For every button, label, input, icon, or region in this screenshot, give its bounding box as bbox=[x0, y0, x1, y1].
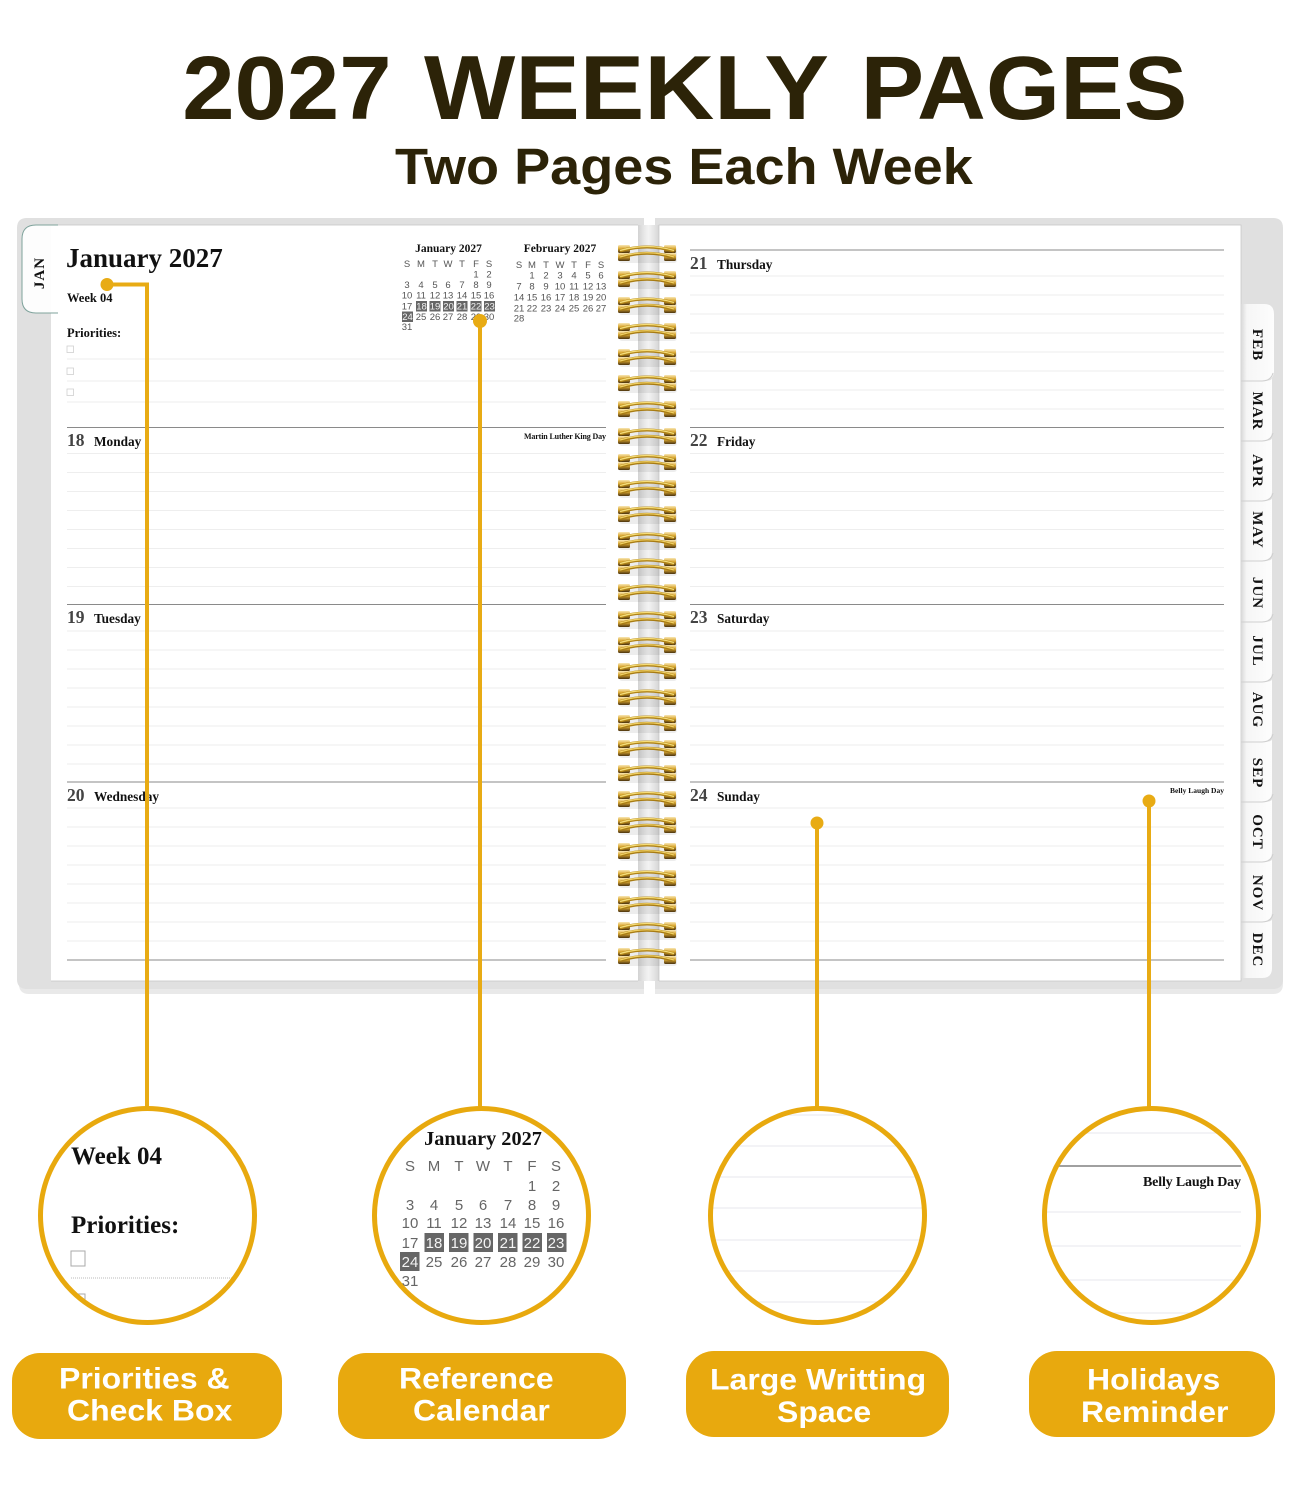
day labels: 22 bbox=[690, 430, 708, 450]
month tabs: FEB bbox=[1249, 329, 1265, 361]
callout circle: priorities bbox=[40, 1108, 254, 1322]
day labels: Monday bbox=[94, 434, 142, 449]
label pill: Large Writting Space bbox=[686, 1351, 949, 1437]
month tabs: OCT bbox=[1249, 814, 1265, 850]
mini calendar: February: 9 bbox=[543, 282, 549, 292]
label pill: Reference Calendar: Reference bbox=[399, 1361, 554, 1395]
mini calendar: January: 17 bbox=[402, 302, 412, 312]
mini calendar: January: 2 bbox=[486, 270, 492, 280]
callout circle: reference calendar: 1 bbox=[528, 1178, 536, 1195]
day labels: Thursday bbox=[717, 257, 773, 272]
callout circle: reference calendar: 5 bbox=[455, 1197, 463, 1214]
day labels: Tuesday bbox=[94, 611, 141, 626]
callout circle: reference calendar: T bbox=[503, 1158, 513, 1175]
mini calendar: January: 3 bbox=[404, 280, 410, 291]
panel: left page bbox=[51, 225, 638, 981]
mini calendar: February: 6 bbox=[598, 270, 604, 282]
label pill: Priorities & Check Box: Check Box bbox=[67, 1393, 233, 1427]
callout circle: reference calendar: 24 bbox=[402, 1254, 418, 1271]
mini calendar: February: 14 bbox=[514, 292, 524, 304]
mini calendar: February bbox=[514, 243, 606, 324]
holiday: Belly Laugh Day: Belly Laugh Day bbox=[1170, 786, 1224, 795]
mini calendar: January: 15 bbox=[471, 290, 481, 302]
callout circle: reference calendar: 19 bbox=[451, 1235, 467, 1252]
callout circle: reference calendar: 17 bbox=[402, 1235, 418, 1252]
callout circle: reference calendar: T bbox=[454, 1158, 464, 1175]
mini calendar: February: 25 bbox=[569, 304, 579, 314]
mini calendar: January: T bbox=[459, 259, 465, 270]
mini calendar: January: 12 bbox=[430, 290, 440, 302]
callout circle: reference calendar: 29 bbox=[524, 1254, 540, 1271]
callout circle: reference calendar bbox=[374, 1108, 588, 1322]
mini calendar: February: February 2027 bbox=[524, 243, 596, 255]
day labels: Friday bbox=[717, 434, 756, 449]
callout circle: reference calendar: 30 bbox=[548, 1254, 564, 1271]
mini calendar: February: T bbox=[543, 260, 549, 271]
label pill: Reference Calendar bbox=[338, 1353, 626, 1439]
callout circle: reference calendar: 21 bbox=[500, 1235, 516, 1252]
mini calendar: February: M bbox=[528, 260, 536, 271]
callout circle: reference calendar: 6 bbox=[479, 1197, 487, 1214]
spiral binding rings bbox=[618, 245, 677, 966]
connector: priorities bbox=[100, 278, 147, 1108]
callout circle: reference calendar: 22 bbox=[524, 1235, 540, 1252]
callout circle: reference calendar: 31 bbox=[402, 1273, 418, 1290]
mini calendar: January: 18 bbox=[416, 302, 427, 312]
month tabs: JUN bbox=[1249, 577, 1265, 609]
label pill: Holidays Reminder: Holidays bbox=[1087, 1362, 1220, 1396]
day labels: 20 bbox=[67, 785, 85, 805]
mini calendar: January: 25 bbox=[416, 312, 426, 323]
day labels: 18 bbox=[67, 430, 85, 450]
mini calendar: February: 7 bbox=[516, 282, 522, 292]
callout circle: reference calendar: 8 bbox=[528, 1197, 536, 1214]
mini calendar: January: 7 bbox=[459, 280, 465, 291]
mini calendar: February: W bbox=[556, 260, 565, 271]
mini calendar: January: M bbox=[417, 259, 425, 270]
callout circle: priorities: Priorities: bbox=[71, 1212, 179, 1239]
mini calendar: February: 12 bbox=[583, 282, 593, 292]
day labels: 23 bbox=[690, 607, 708, 627]
panel: right cover bbox=[655, 218, 1283, 994]
week label: Week 04 bbox=[67, 291, 113, 305]
mini calendar: January: 20 bbox=[443, 302, 454, 312]
title: WEEKLY bbox=[424, 37, 829, 138]
title bbox=[182, 37, 1187, 139]
callout circle: reference calendar: 18 bbox=[426, 1235, 442, 1252]
title: 2027 bbox=[182, 37, 392, 139]
mini calendar: February: 5 bbox=[585, 270, 591, 282]
month tabs: AUG bbox=[1249, 692, 1265, 728]
callout circle: reference calendar: 26 bbox=[451, 1254, 467, 1271]
callout circle: reference calendar: 16 bbox=[548, 1215, 564, 1232]
month tabs: SEP bbox=[1249, 758, 1265, 788]
mini calendar: January: 21 bbox=[457, 302, 467, 312]
mini calendar: February: 28 bbox=[514, 314, 524, 324]
subtitle: Two Pages Each Week bbox=[395, 138, 974, 196]
mini calendar: February: 19 bbox=[583, 292, 593, 304]
day labels: Saturday bbox=[717, 611, 770, 626]
label pill: Priorities & Check Box bbox=[12, 1353, 282, 1439]
mini calendar: February: 8 bbox=[529, 282, 535, 292]
mini calendar: February: 21 bbox=[514, 304, 524, 314]
label pill: Holidays Reminder bbox=[1029, 1351, 1275, 1437]
mini calendar: January: 29 bbox=[471, 312, 481, 323]
callout circle: reference calendar: S bbox=[551, 1158, 561, 1175]
mini calendar: February: 10 bbox=[555, 282, 565, 292]
mini calendar: February: 16 bbox=[541, 292, 551, 304]
mini calendar: February: 18 bbox=[569, 292, 579, 304]
mini calendar: February: 15 bbox=[527, 292, 537, 304]
mini calendar: January: T bbox=[432, 259, 438, 270]
mini calendar: January: 10 bbox=[402, 290, 412, 302]
right page ruled lines bbox=[690, 276, 1224, 941]
label pill: Priorities & Check Box: Priorities & bbox=[59, 1361, 230, 1395]
month tabs bbox=[1241, 304, 1274, 978]
callout circle: holidays: Belly Laugh Day bbox=[1143, 1175, 1241, 1190]
day labels: Sunday bbox=[717, 789, 760, 804]
mini calendar: January: 27 bbox=[443, 312, 453, 323]
mini calendar: February: 13 bbox=[596, 282, 606, 292]
callout circle: reference calendar: 27 bbox=[475, 1254, 491, 1271]
callout circle: reference calendar: 10 bbox=[402, 1215, 418, 1232]
callout circle: reference calendar: 14 bbox=[500, 1215, 516, 1232]
mini calendar: February: 11 bbox=[569, 282, 579, 292]
mini calendar: January: 11 bbox=[416, 290, 426, 302]
mini calendar: January: 22 bbox=[471, 302, 481, 312]
mini calendar: February: 26 bbox=[583, 304, 593, 314]
planner spread bbox=[17, 218, 1283, 994]
mini calendar: February: F bbox=[585, 260, 591, 271]
callout circle: reference calendar: January 2027 bbox=[424, 1128, 542, 1150]
mini calendar: February: S bbox=[598, 260, 604, 271]
label pill: Holidays Reminder: Reminder bbox=[1081, 1395, 1228, 1429]
callout circle: reference calendar: W bbox=[476, 1158, 491, 1175]
mini calendar: February: 23 bbox=[541, 304, 551, 314]
spine gutter bbox=[638, 225, 659, 981]
day labels: 24 bbox=[690, 785, 708, 805]
callout circle: reference calendar: M bbox=[428, 1158, 440, 1175]
panel: right page bbox=[659, 225, 1241, 981]
mini calendar: February: S bbox=[516, 260, 522, 271]
callout circle: reference calendar: 7 bbox=[504, 1197, 512, 1214]
month tabs: JUL bbox=[1249, 635, 1265, 667]
tab: JAN bbox=[22, 225, 60, 313]
mini calendar: February: 1 bbox=[529, 270, 535, 282]
mini calendar: January: 23 bbox=[484, 302, 495, 312]
mini calendar: February: 17 bbox=[555, 292, 565, 304]
callout circle: reference calendar: 25 bbox=[426, 1254, 442, 1271]
mini calendar: January: S bbox=[404, 259, 410, 270]
panel: left cover bbox=[17, 218, 644, 994]
month tabs: MAY bbox=[1249, 511, 1265, 549]
day labels bbox=[67, 253, 773, 805]
mini calendar: January: 6 bbox=[445, 280, 451, 291]
callout circle: reference calendar: 2 bbox=[552, 1178, 560, 1195]
callout circle: reference calendar: 3 bbox=[406, 1197, 414, 1214]
mini calendar: January: 31 bbox=[402, 322, 412, 333]
callout circle: holidays bbox=[1040, 1108, 1258, 1322]
title: PAGES bbox=[860, 37, 1187, 138]
label pill: Large Writting Space: Large Writting bbox=[710, 1362, 926, 1396]
mini calendar: February: 3 bbox=[557, 270, 563, 282]
mini calendar: February: 2 bbox=[543, 270, 549, 282]
left page ruled lines bbox=[67, 359, 606, 941]
mini calendar: January: 5 bbox=[432, 280, 438, 291]
mini calendar: January bbox=[402, 243, 495, 333]
page edges bbox=[51, 225, 1241, 981]
holiday: Martin Luther King Day: Martin Luther King Day bbox=[524, 432, 606, 441]
callout circle: reference calendar: 11 bbox=[426, 1215, 442, 1232]
left page day dividers bbox=[67, 428, 606, 960]
mini calendar: January: 24 bbox=[402, 312, 413, 323]
mini calendar: January: 13 bbox=[443, 290, 453, 302]
month tabs: DEC bbox=[1249, 933, 1265, 967]
mini calendar: February: T bbox=[571, 260, 577, 271]
mini calendar: January: 14 bbox=[457, 290, 467, 302]
day labels: 19 bbox=[67, 607, 85, 627]
callout circle: reference calendar: 20 bbox=[475, 1235, 491, 1252]
right page day dividers bbox=[690, 250, 1224, 960]
month tabs: APR bbox=[1249, 454, 1265, 488]
callout circle: reference calendar: 4 bbox=[430, 1197, 438, 1214]
callout circle: reference calendar: 28 bbox=[500, 1254, 516, 1271]
connector: writing space bbox=[810, 816, 824, 1108]
day labels: 21 bbox=[690, 253, 708, 273]
mini calendar: January: January 2027 bbox=[415, 243, 482, 255]
mini calendar: January: S bbox=[486, 259, 492, 270]
mini calendar: January: 8 bbox=[473, 280, 479, 291]
day labels: Wednesday bbox=[94, 789, 159, 804]
mini calendar: January: F bbox=[473, 259, 479, 270]
mini calendar: January: 26 bbox=[430, 312, 440, 323]
mini calendar: February: 4 bbox=[571, 270, 577, 282]
callout circle: writing space bbox=[700, 1108, 930, 1322]
month tabs: MAR bbox=[1249, 392, 1265, 430]
callout circle: reference calendar: F bbox=[527, 1158, 537, 1175]
mini calendar: January: 28 bbox=[457, 312, 467, 323]
callout circle: reference calendar: 12 bbox=[451, 1215, 467, 1232]
callout circle: reference calendar: 9 bbox=[552, 1197, 560, 1214]
callout circle: priorities: Week 04 bbox=[71, 1143, 162, 1170]
callout circle: reference calendar: 13 bbox=[475, 1215, 491, 1232]
mini calendar: January: 30 bbox=[484, 312, 494, 323]
mini calendar: January: 1 bbox=[473, 270, 479, 280]
mini calendar: January: 4 bbox=[418, 280, 424, 291]
label pill: Reference Calendar: Calendar bbox=[413, 1393, 550, 1427]
priority checkboxes bbox=[67, 346, 74, 396]
callout circle: reference calendar: S bbox=[405, 1158, 415, 1175]
month tabs: NOV bbox=[1249, 875, 1265, 911]
page heading: January 2027 bbox=[66, 243, 223, 273]
mini calendar: January: 16 bbox=[484, 290, 494, 302]
label pill: Large Writting Space: Space bbox=[777, 1395, 871, 1429]
connector: reference calendar bbox=[473, 314, 487, 1108]
connector: holidays bbox=[1142, 794, 1156, 1108]
callout circle: reference calendar: 23 bbox=[548, 1235, 564, 1252]
mini calendar: January: 19 bbox=[430, 302, 440, 312]
tab: JAN: JAN bbox=[32, 257, 48, 289]
mini calendar: January: 9 bbox=[486, 280, 492, 291]
mini calendar: February: 24 bbox=[555, 304, 565, 314]
callout circle: reference calendar: 15 bbox=[524, 1215, 540, 1232]
mini calendar: February: 20 bbox=[596, 292, 606, 304]
mini calendar: February: 22 bbox=[527, 304, 537, 314]
mini calendar: February: 27 bbox=[596, 304, 606, 314]
priorities label: Priorities: bbox=[67, 326, 121, 340]
mini calendar: January: W bbox=[444, 259, 453, 270]
